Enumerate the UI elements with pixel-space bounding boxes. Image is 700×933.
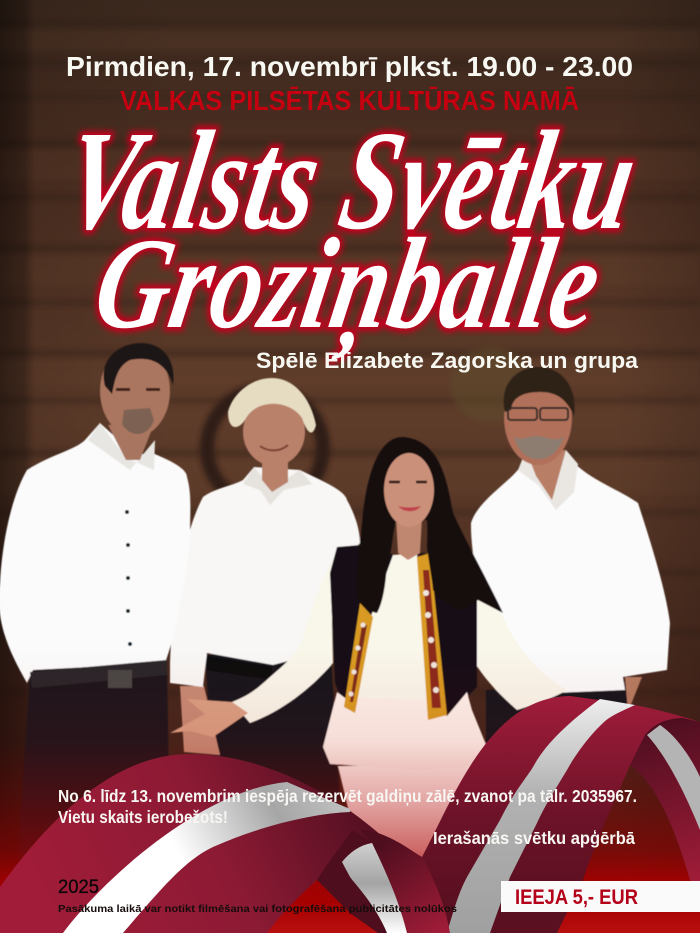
dress code note: Ierašanās svētku apģērbā: [433, 828, 635, 848]
date and time heading: Pirmdien, 17. novembrī plkst. 19.00 - 23.00: [66, 51, 633, 82]
filming disclaimer: Pasākuma laikā var notikt filmēšana vai fotografēšana publicitātes nolūkos: [58, 903, 457, 915]
wreath and hanging plant on wall: [207, 347, 530, 506]
trousers: [338, 764, 480, 880]
red fade at bottom of the photo: [0, 650, 700, 933]
man on the left: [0, 343, 190, 860]
performer line: Spēlē Elizabete Zagorska un grupa: [256, 348, 639, 373]
inner dark loop: [317, 830, 387, 933]
right loop white stripe: [647, 725, 700, 830]
blouse: [345, 553, 430, 700]
face: [384, 453, 434, 527]
hair: [357, 437, 503, 613]
ruffled skirt: [323, 692, 487, 770]
right sleeve: [473, 590, 567, 710]
hand: [170, 699, 248, 737]
embroidered trims: [344, 553, 447, 720]
outer right crimson fold: [360, 830, 450, 933]
woman in folk costume: [170, 437, 567, 880]
year: 2025: [58, 877, 99, 898]
man with hat: [170, 378, 360, 800]
vest: [330, 545, 477, 717]
reservation note: Vietu skaits ierobežots!: [58, 807, 228, 827]
entry price box: [501, 881, 700, 912]
neck: [396, 518, 422, 560]
venue heading: VALKAS PILSĒTAS KULTŪRAS NAMĀ: [120, 85, 579, 116]
inner white stripe: [342, 843, 407, 933]
right ribbon crimson band: [422, 696, 700, 933]
reservation note: No 6. līdz 13. novembrim iespēja rezervēt galdiņu zālē, zvanot pa tālr. 2035967.: [58, 786, 637, 806]
man on the right: [471, 367, 670, 760]
right ribbon: [422, 696, 700, 933]
reservation note: [58, 786, 637, 827]
entry price box: IEEJA 5,- EUR: [515, 886, 638, 909]
left ribbon: [0, 754, 450, 933]
right ribbon white stripe: [447, 699, 635, 933]
photo: band members: [0, 343, 670, 880]
title: Valsts Svētku Groziņballe: [54, 101, 647, 361]
left ribbon white stripe: [63, 782, 350, 933]
left ribbon crimson band: [0, 754, 383, 933]
left sleeve: [232, 552, 337, 723]
right loop dark band: [630, 718, 700, 897]
